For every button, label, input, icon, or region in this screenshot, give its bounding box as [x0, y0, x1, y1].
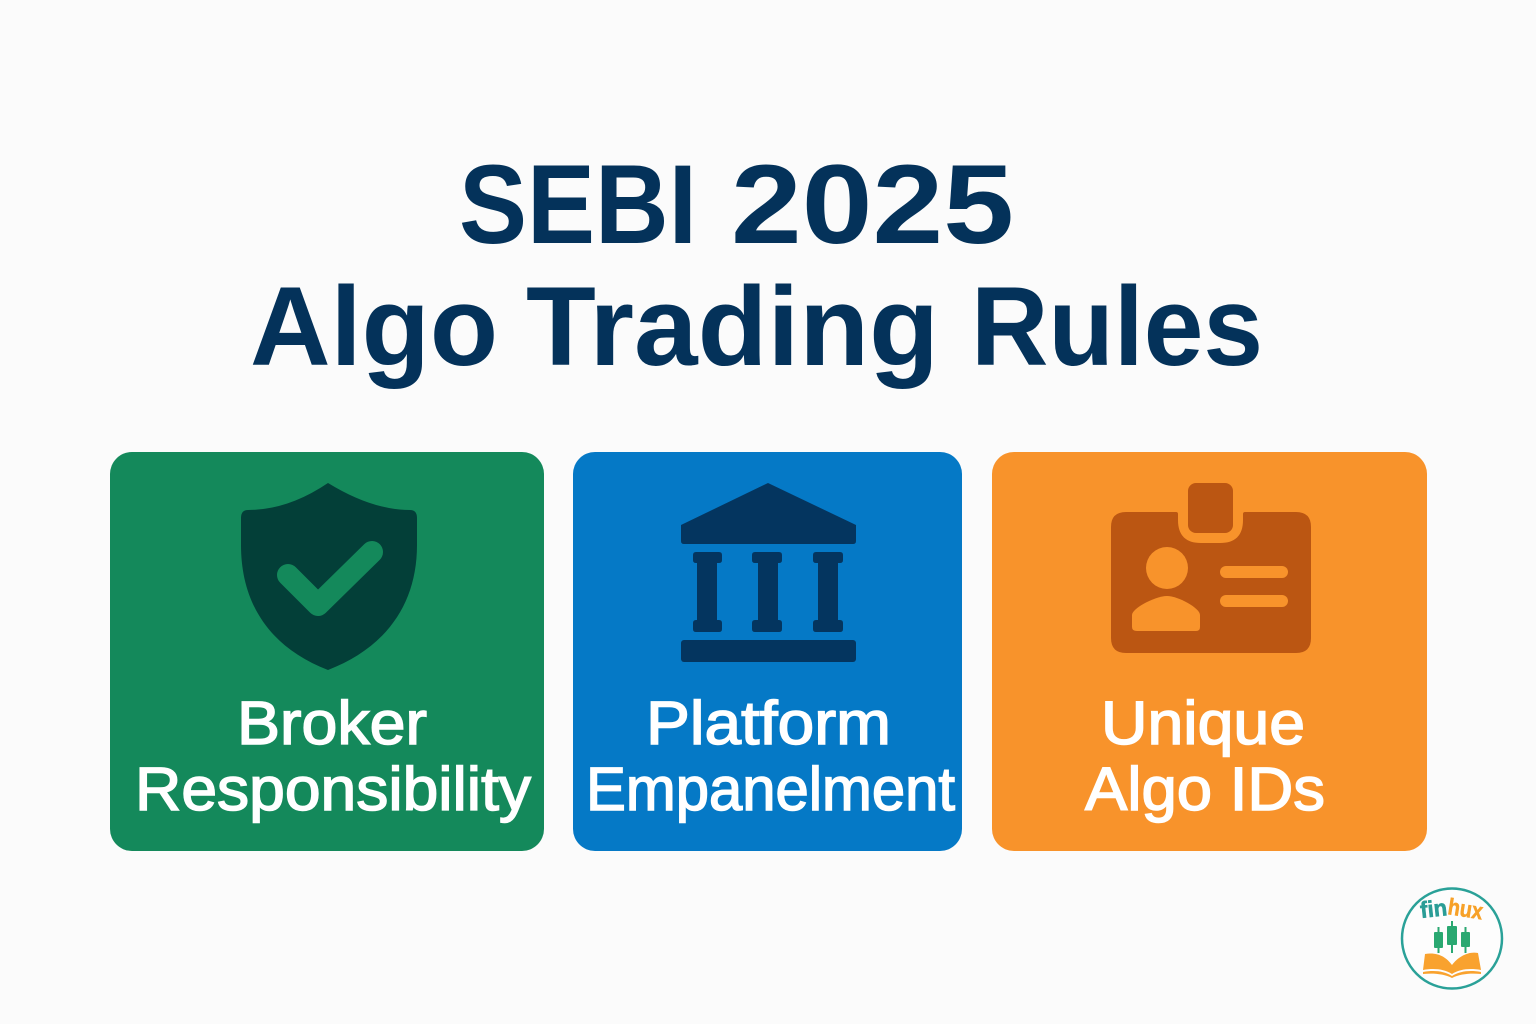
logo wordmark: [1419, 893, 1485, 924]
logo: finhux: [1402, 888, 1502, 988]
logo wordmark: hux: [1446, 893, 1485, 924]
label: Broker Responsibility: Broker: [237, 689, 427, 757]
icon: institution building: [681, 483, 856, 662]
label: Unique Algo IDs: Unique: [1101, 689, 1305, 757]
label: Platform Empanelment: [586, 689, 955, 823]
title: Rules: [971, 264, 1263, 389]
panel: unique algo IDs: [992, 452, 1427, 851]
logo candlesticks: [1434, 921, 1470, 953]
icon: ID badge: [1111, 483, 1311, 653]
label: Broker Responsibility: Responsibility: [135, 755, 532, 823]
title: Algo: [250, 264, 498, 389]
label: Platform Empanelment: Empanelment: [586, 755, 955, 823]
label: Broker Responsibility: [135, 689, 532, 823]
title: Trading: [526, 264, 939, 389]
title: 2025: [731, 142, 1014, 267]
logo open book: [1423, 953, 1481, 978]
title: SEBI: [459, 142, 697, 267]
panel: broker responsibility: [110, 452, 544, 851]
icon: shield with check mark: [241, 483, 417, 670]
label: Platform Empanelment: Platform: [646, 689, 891, 757]
title: [250, 142, 1263, 389]
label: Unique Algo IDs: [1085, 689, 1325, 823]
label: Unique Algo IDs: Algo IDs: [1085, 755, 1325, 823]
logo wordmark: fin: [1419, 894, 1448, 923]
panel: platform empanelment: [573, 452, 962, 851]
